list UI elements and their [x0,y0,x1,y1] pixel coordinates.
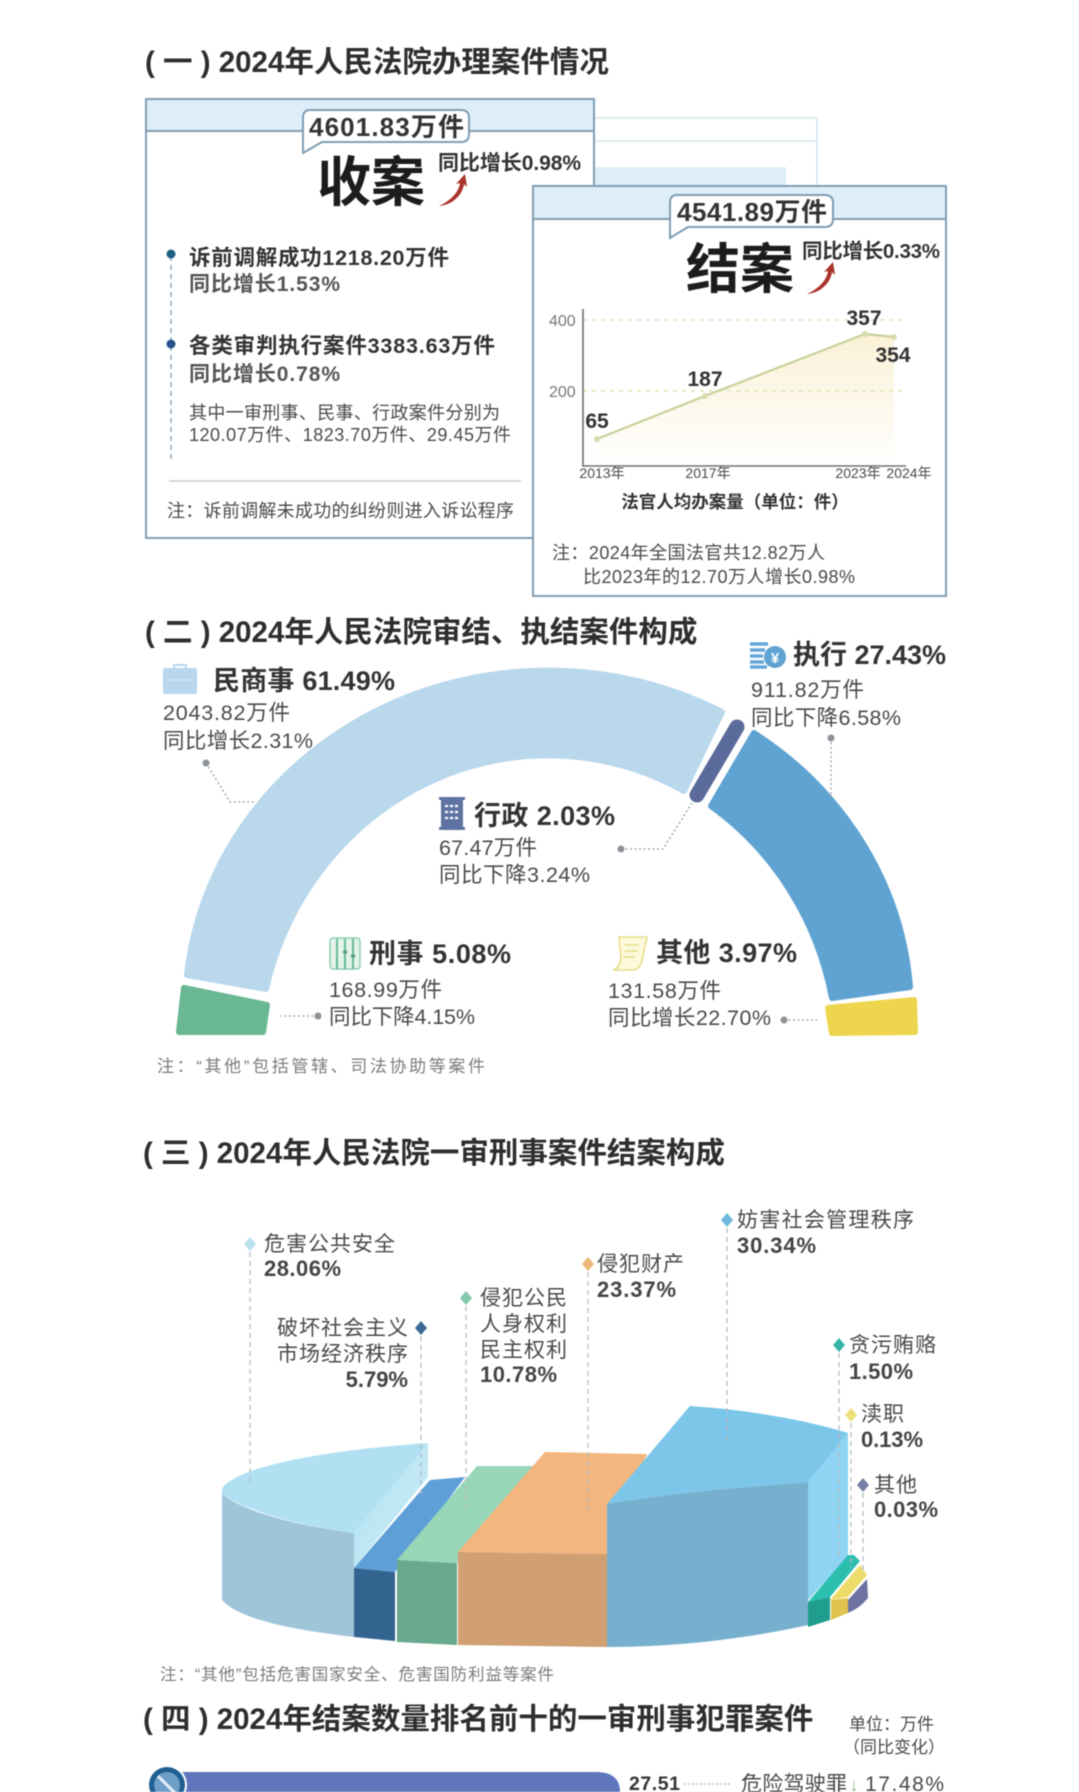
note: judges [552,543,855,587]
icon: up arrow [807,262,835,294]
label: other: 其他 3.97% [656,938,797,968]
label: administrative: 67.47万件 [439,836,537,860]
callout: concluded total [670,195,833,238]
note: section two: 注：“其他”包括管辖、司法协助等案件 [157,1057,485,1076]
label: personal rights: 10.78% [480,1362,557,1387]
label: economic order [277,1317,427,1495]
text: received growth: 同比增长0.98% [438,152,581,175]
slice: corruption [808,1555,860,1627]
label: social management order: 妨害社会管理秩序 [737,1209,914,1232]
slice: property [458,1452,647,1647]
line chart: cases per judge: 2013年 [579,465,625,481]
label: enforcement: 同比下降6.58% [751,706,901,730]
slice: personal rights [397,1466,537,1645]
line chart: cases per judge: 354 [875,344,911,367]
callout: received total: 4601.83万件 [309,112,464,142]
label: civil and commercial [163,665,395,802]
label: civil and commercial: 2043.82万件 [163,701,290,725]
note: mediation: 注：诉前调解未成功的纠纷则进入诉讼程序 [167,501,514,521]
slice: public safety [222,1443,428,1637]
label: property: 23.37% [597,1277,676,1302]
heading: concluded: 结案 [686,240,794,300]
label: corruption [833,1334,936,1560]
label: administrative: 行政 2.03% [474,801,615,831]
text: trial and enforcement cases: 各类审判执行案件3383.63万件 [189,333,495,358]
text: trial and enforcement cases [189,333,511,445]
text: concluded growth: 同比增长0.33% [802,240,940,263]
note: judges: 注：2024年全国法官共12.82万人 [552,543,825,563]
label: other: 同比增长22.70% [608,1006,771,1030]
label: criminal: 168.99万件 [329,978,442,1002]
slice: economic order [354,1477,465,1641]
note: section three: 注：“其他”包括危害国家安全、危害国防利益等案件 [160,1665,554,1684]
segment: other [828,1000,915,1033]
slice: social management order [607,1406,848,1647]
label: other crimes: 其他 [874,1474,917,1497]
line chart: cases per judge: 400 [549,313,576,330]
icon: up arrow [439,174,467,206]
label: personal rights: 侵犯公民 [480,1287,567,1310]
chart: 3D pie [222,1406,868,1647]
label: administrative: 同比下降3.24% [439,863,590,887]
label: corruption: 贪污贿赂 [849,1334,936,1357]
label: other: 131.58万件 [608,979,721,1003]
panel: cases concluded [533,186,946,596]
line chart: cases per judge: 357 [846,307,882,330]
line chart: cases per judge [549,307,932,512]
panel: background decorative card [594,118,817,238]
line chart: cases per judge: 2024年 [886,465,932,481]
segment: civil and commercial [187,671,722,989]
line chart: cases per judge: 65 [585,410,609,433]
label: economic order: 5.79% [346,1367,408,1392]
text: pre-litigation mediation: 诉前调解成功1218.20万件 [189,246,449,270]
label: dereliction [845,1403,923,1568]
label: other [608,937,817,1030]
line chart: cases per judge: 2017年 [685,465,731,481]
label: corruption: 1.50% [849,1359,913,1384]
label: criminal: 同比下降4.15% [329,1005,475,1029]
label: property [582,1253,684,1515]
line chart: cases per judge: 法官人均办案量（单位：件） [621,492,849,512]
text: trial and enforcement cases: 其中一审刑事、民事、行政案件分别为 [189,403,500,423]
slice: other [848,1579,868,1613]
label: economic order: 市场经济秩序 [277,1343,408,1366]
segment: criminal [179,988,267,1032]
label: personal rights: 人身权利 [480,1313,567,1336]
label: dereliction: 0.13% [861,1427,923,1452]
slice: dereliction [830,1565,867,1620]
text: unit [843,1715,945,1757]
label: administrative [439,797,692,887]
chart: semicircle composition [179,671,915,1033]
text: unit: （同比变化） [843,1738,945,1757]
heading: section one: ( 一 ) 2024年人民法院办理案件情况 [145,46,609,79]
label: criminal: 刑事 5.08% [369,939,511,969]
label: economic order: 破坏社会主义 [277,1317,408,1340]
text: trial and enforcement cases: 120.07万件、1823.70万件、29.45万件 [189,425,511,445]
line chart: cases per judge: 2023年 [835,465,881,481]
label: social management order: 30.34% [737,1233,816,1258]
timeline [166,250,176,460]
heading: section two: ( 二 ) 2024年人民法院审结、执结案件构成 [145,616,697,649]
callout: concluded total: 4541.89万件 [677,197,827,227]
panel: cases received [146,99,594,538]
heading: section four: ( 四 ) 2024年结案数量排名前十的一审刑事犯罪案件 [143,1703,813,1736]
label: personal rights [460,1287,567,1515]
heading: section three: ( 三 ) 2024年人民法院一审刑事案件结案构成 [143,1137,725,1170]
line chart: cases per judge: 187 [687,368,723,391]
label: civil and commercial: 同比增长2.31% [163,729,313,753]
bar: dangerous driving [147,1765,944,1792]
label: enforcement [750,640,946,798]
text: pre-litigation mediation: 同比增长1.53% [189,273,340,296]
label: criminal [281,938,511,1029]
segment: administrative [697,727,737,795]
label: dereliction: 渎职 [861,1403,904,1426]
note: judges: 比2023年的12.70万人增长0.98% [583,567,855,587]
segment: enforcement [711,733,910,998]
label: social management order [721,1209,914,1445]
label: property: 侵犯财产 [597,1253,684,1276]
label: enforcement: 911.82万件 [751,678,864,702]
callout: received total [303,110,469,153]
label: other crimes [857,1474,938,1575]
label: enforcement: 执行 27.43% [793,640,946,670]
label: personal rights: 民主权利 [480,1339,567,1362]
label: public safety [244,1233,395,1485]
text: unit: 单位：万件 [849,1715,934,1734]
text: trial and enforcement cases: 同比增长0.78% [189,363,340,386]
text: pre-litigation mediation [189,246,449,296]
label: civil and commercial: 民商事 61.49% [213,666,395,696]
line chart: cases per judge: 200 [549,384,576,401]
label: public safety: 危害公共安全 [264,1233,395,1256]
label: enforcement: ¥ [771,650,780,667]
heading: received: 收案 [317,153,425,213]
label: public safety: 28.06% [264,1256,341,1281]
label: other crimes: 0.03% [874,1497,938,1522]
